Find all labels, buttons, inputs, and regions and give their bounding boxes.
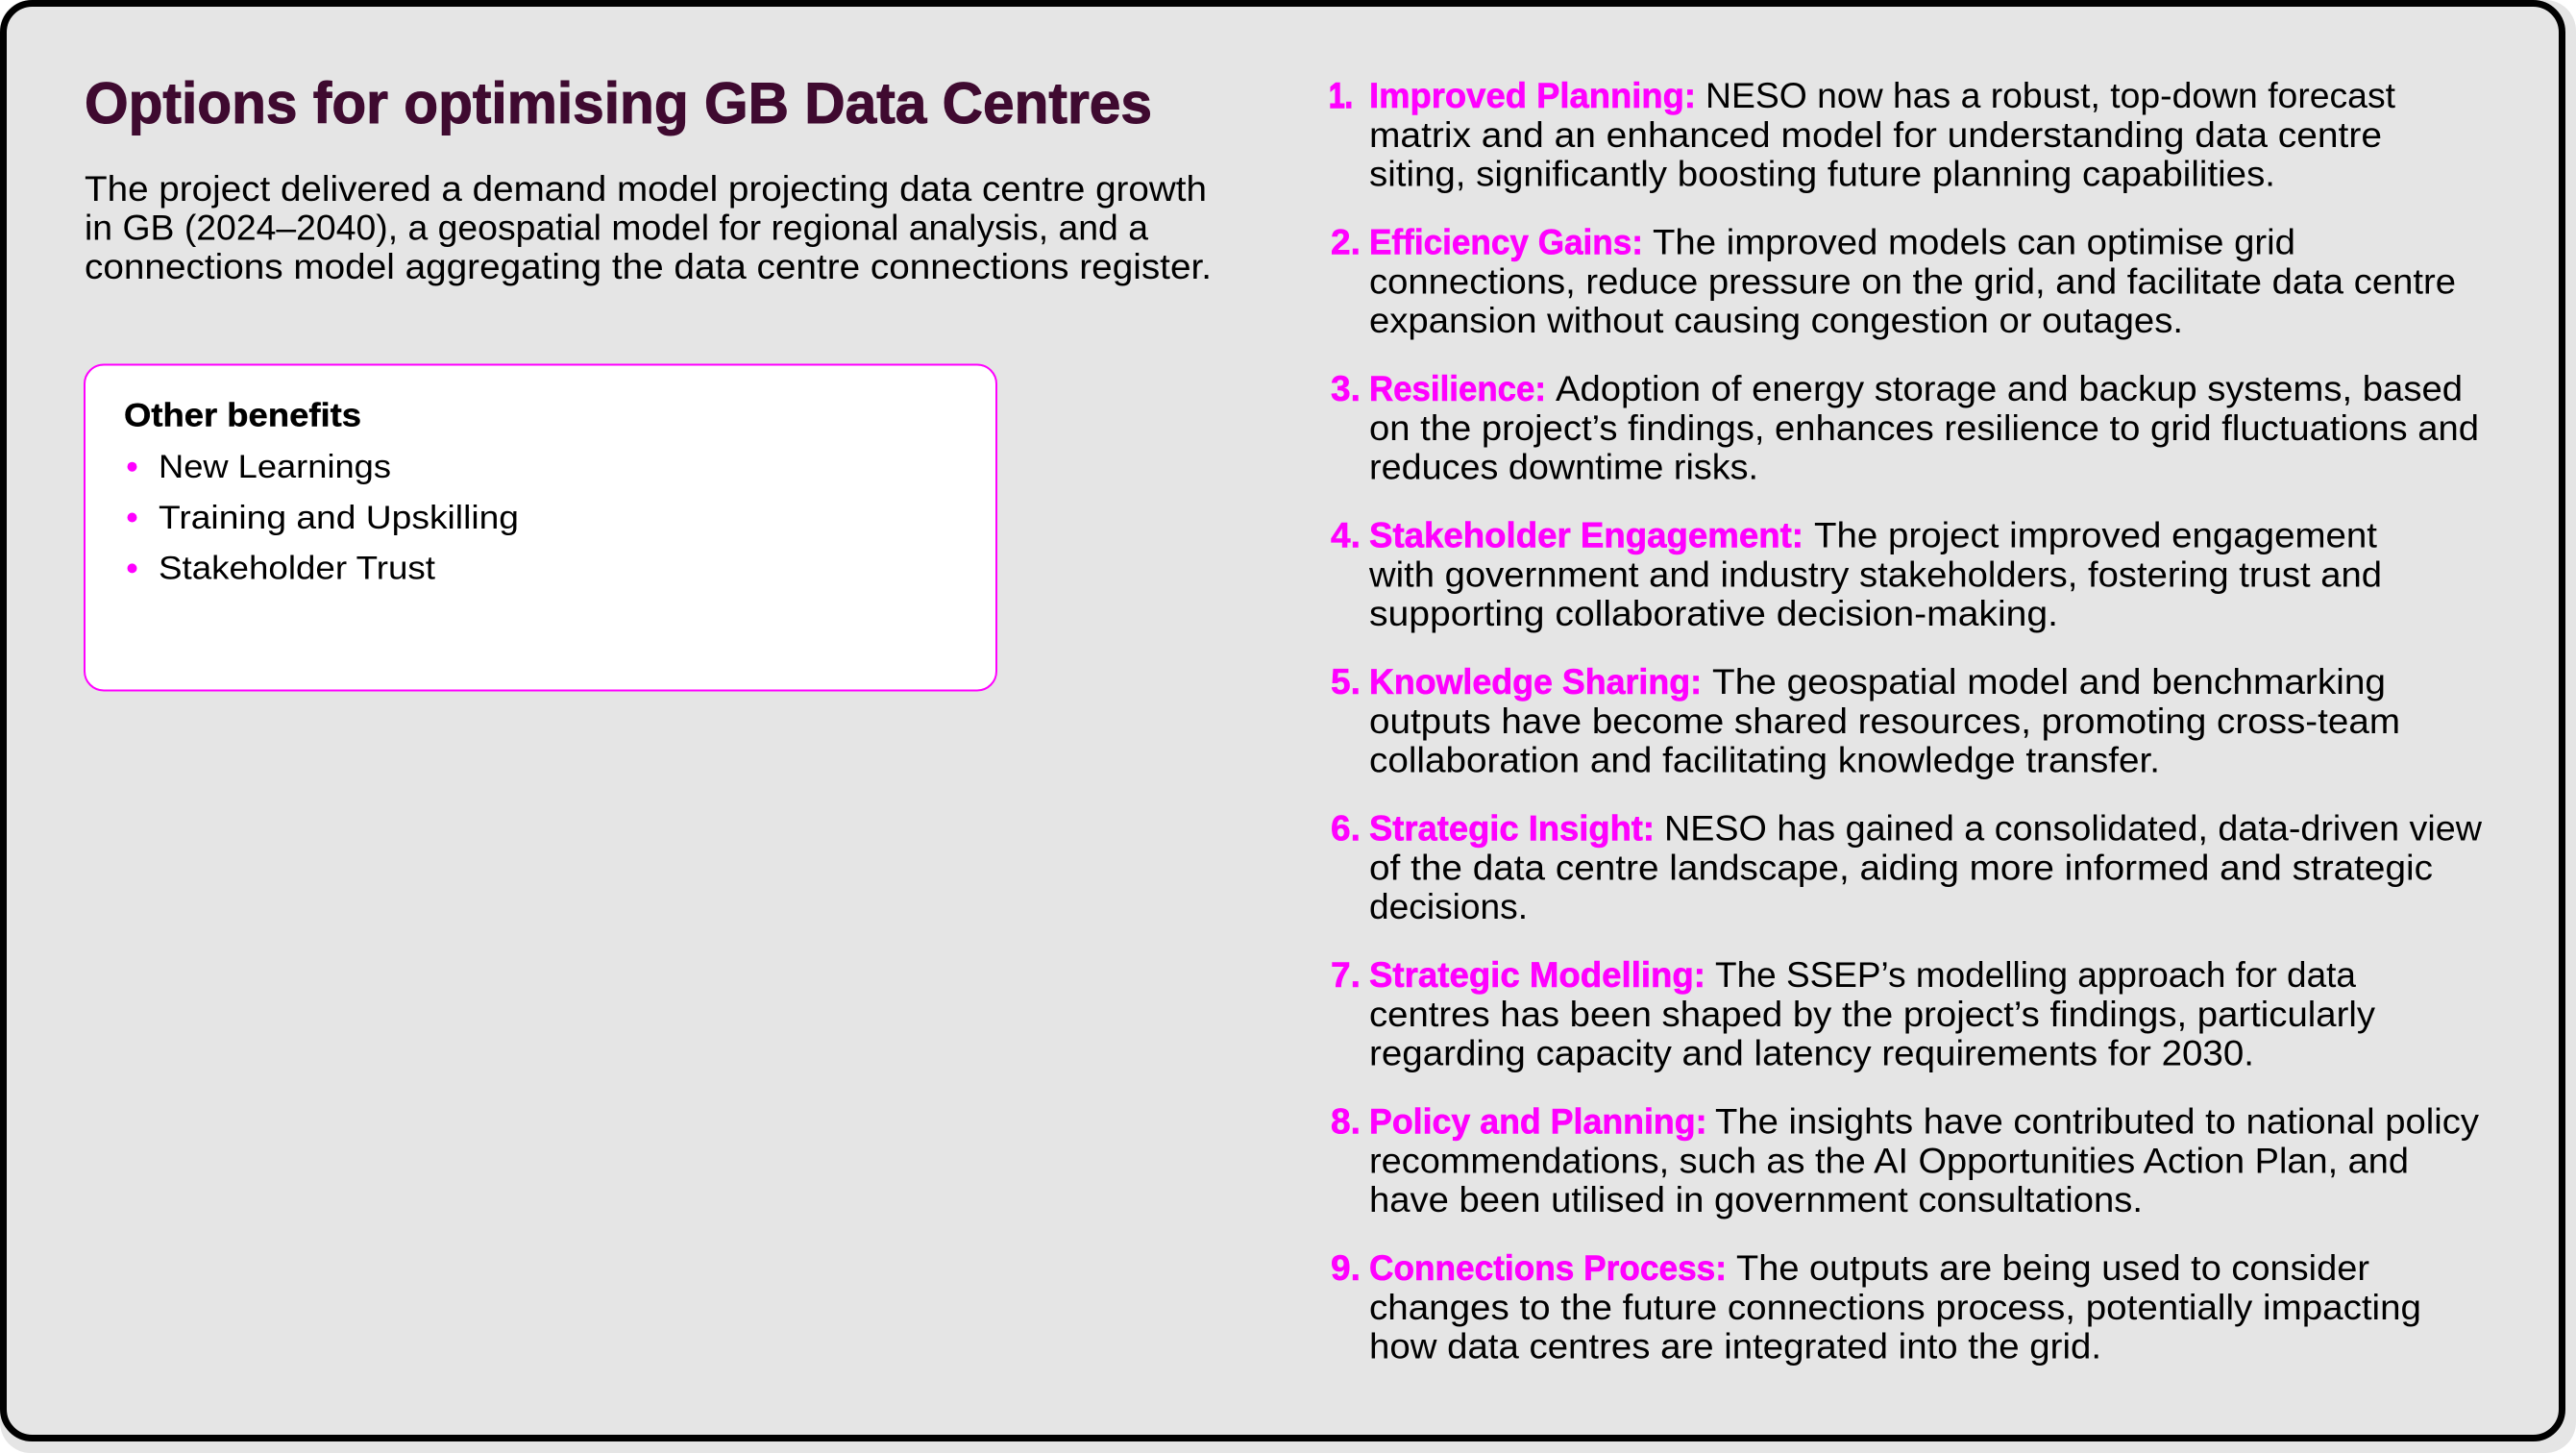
title: Options for optimising GB Data Centres [85, 71, 1152, 135]
item 2: efficiency gains: connections, reduce pressure on the grid, and facilitate data centre [1369, 261, 2456, 302]
item 6: strategic insight: Strategic Insight: [1369, 809, 1655, 848]
item 5: knowledge sharing: Knowledge Sharing: [1369, 662, 1702, 702]
item 8: policy and planning: 8. [1331, 1101, 1361, 1142]
intro paragraph: The project delivered a demand model projecting data centre growth [85, 169, 1207, 209]
item 1: improved planning: NESO now has a robust, top-down forecast [1705, 76, 2396, 115]
item 4: stakeholder engagement: The project improved engagement [1814, 515, 2378, 555]
item 6: strategic insight [1331, 809, 2482, 926]
item 8: policy and planning [1331, 1101, 2480, 1219]
item 1: improved planning [1329, 76, 2396, 194]
item 1: improved planning: Improved Planning: [1369, 76, 1696, 115]
item 5: knowledge sharing [1331, 662, 2400, 780]
item 4: stakeholder engagement [1331, 515, 2382, 633]
intro paragraph: in GB (2024–2040), a geospatial model for regional analysis, and a [85, 208, 1148, 248]
item 9: connections process: how data centres are integrated into the grid. [1369, 1326, 2101, 1367]
intro paragraph: connections model aggregating the data centre connections register. [85, 247, 1212, 286]
item 2: efficiency gains: Efficiency Gains: [1369, 223, 1643, 261]
item 7: strategic modelling: regarding capacity and latency requirements for 2030. [1369, 1034, 2254, 1072]
item 7: strategic modelling: The SSEP’s modelling approach for data [1715, 955, 2356, 995]
item 4: stakeholder engagement: Stakeholder Engagement: [1369, 515, 1803, 555]
item 1: improved planning: 1. [1329, 76, 1353, 115]
item 6: strategic insight: NESO has gained a consolidated, data-driven view [1664, 809, 2482, 848]
item 8: policy and planning: The insights have contributed to national policy [1715, 1101, 2480, 1142]
panel: other benefits [85, 365, 996, 690]
item 8: policy and planning: have been utilised in government consultations. [1369, 1180, 2143, 1219]
item 6: strategic insight: decisions. [1369, 887, 1528, 926]
item 5: knowledge sharing: The geospatial model and benchmarking [1712, 662, 2386, 702]
item 3: resilience: Adoption of energy storage and backup systems, based [1556, 369, 2463, 408]
item 7: strategic modelling: Strategic Modelling: [1369, 955, 1705, 995]
item 5: knowledge sharing: outputs have become shared resources, promoting cross-team [1369, 702, 2400, 741]
item 9: connections process [1331, 1248, 2421, 1367]
panel heading: Other benefits [124, 398, 361, 434]
item 9: connections process: 9. [1331, 1248, 1361, 1288]
item 3: resilience: Resilience: [1369, 369, 1546, 408]
item 9: connections process: changes to the future connections process, potentially impacting [1369, 1288, 2421, 1327]
item 2: efficiency gains: expansion without causing congestion or outages. [1369, 301, 2183, 340]
bullet: training and upskilling: Training and Upskilling [159, 500, 519, 536]
item 7: strategic modelling: centres has been shaped by the project’s findings, particularly [1369, 995, 2376, 1034]
intro paragraph [85, 169, 1212, 286]
item 7: strategic modelling [1331, 955, 2376, 1072]
bullet: new learnings: New Learnings [159, 449, 391, 485]
item 9: connections process: The outputs are being used to consider [1736, 1248, 2369, 1288]
item 4: stakeholder engagement: 4. [1331, 515, 1361, 555]
bullet: stakeholder trust: Stakeholder Trust [159, 550, 436, 586]
panel box [85, 365, 996, 690]
item 6: strategic insight: 6. [1331, 809, 1361, 848]
item 3: resilience: 3. [1331, 369, 1361, 408]
item 2: efficiency gains: 2. [1331, 223, 1361, 261]
item 8: policy and planning: recommendations, such as the AI Opportunities Action Plan, and [1369, 1142, 2409, 1180]
left column [85, 71, 1212, 690]
item 4: stakeholder engagement: with government and industry stakeholders, fostering trust and [1368, 555, 2382, 594]
item 5: knowledge sharing: collaboration and facilitating knowledge transfer. [1369, 740, 2160, 780]
item 8: policy and planning: Policy and Planning: [1369, 1101, 1706, 1142]
item 3: resilience: on the project’s findings, enhances resilience to grid fluctuations and [1369, 408, 2479, 448]
item 6: strategic insight: of the data centre landscape, aiding more informed and strategic [1369, 848, 2433, 888]
item 2: efficiency gains [1331, 223, 2456, 340]
item 9: connections process: Connections Process: [1369, 1248, 1727, 1288]
item 2: efficiency gains: The improved models can optimise grid [1653, 223, 2295, 261]
item 3: resilience: reduces downtime risks. [1369, 448, 1758, 486]
numbered list [1329, 76, 2482, 1367]
item 5: knowledge sharing: 5. [1331, 662, 1361, 702]
item 7: strategic modelling: 7. [1331, 955, 1361, 995]
item 1: improved planning: matrix and an enhanced model for understanding data centre [1369, 115, 2382, 155]
item 3: resilience [1331, 369, 2479, 486]
item 1: improved planning: siting, significantly boosting future planning capabilities. [1369, 154, 2275, 194]
item 4: stakeholder engagement: supporting collaborative decision-making. [1369, 594, 2058, 633]
